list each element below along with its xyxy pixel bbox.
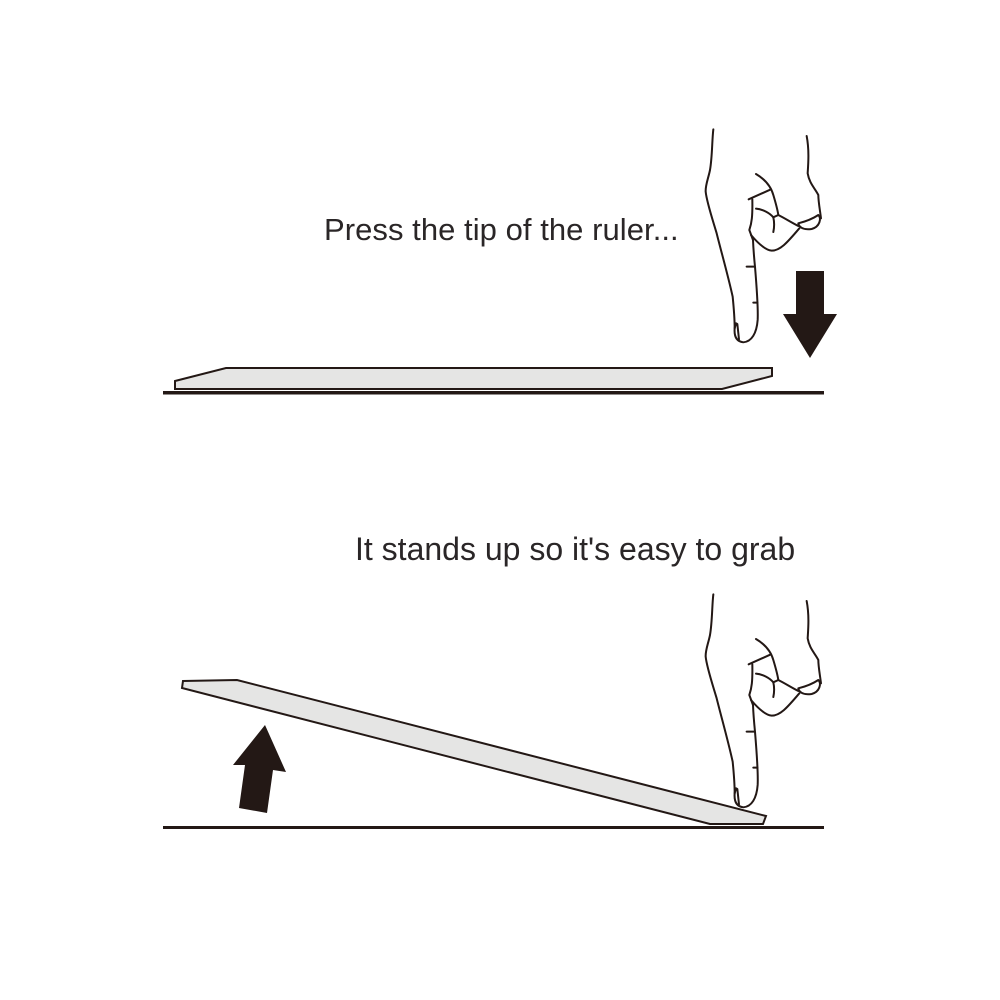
icon: flat ruler [175, 368, 772, 389]
icon: tilted ruler [182, 680, 766, 824]
icon: pressing finger [706, 129, 821, 342]
ground line [163, 391, 824, 394]
ground line [163, 826, 824, 829]
panel: press the ruler [163, 129, 837, 394]
arrow: down [783, 271, 837, 358]
caption: stands up: It stands up so it's easy to grab [355, 531, 795, 567]
caption: press the tip: Press the tip of the ruler... [324, 212, 679, 247]
panel: ruler stands up [163, 531, 824, 829]
icon: pressing finger [706, 594, 821, 807]
arrow: up [233, 725, 286, 813]
